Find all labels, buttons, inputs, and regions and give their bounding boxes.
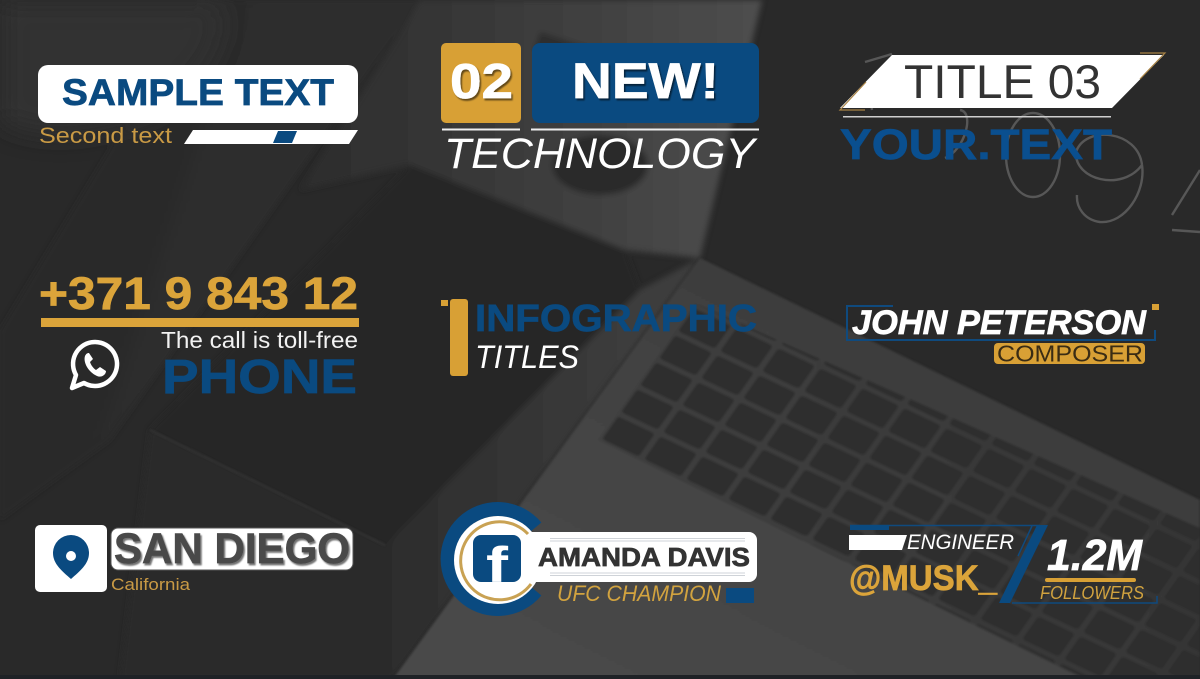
thin frame lines xyxy=(1012,526,1157,603)
title block: john peterson xyxy=(847,304,1159,366)
name: JOHN PETERSON xyxy=(852,304,1147,342)
rules under tiles xyxy=(442,128,759,130)
name: AMANDA DAVIS xyxy=(538,542,750,572)
divider rule xyxy=(843,116,1111,118)
white icon tile xyxy=(35,525,107,592)
your text: YOUR.TEXT xyxy=(840,121,1112,169)
state name: California xyxy=(111,575,191,594)
title block: san diego xyxy=(35,525,353,594)
toll-free note: The call is toll-free xyxy=(161,327,358,353)
followers label: FOLLOWERS xyxy=(1040,583,1144,603)
gold role pill xyxy=(994,343,1145,364)
blue frame xyxy=(847,306,1155,340)
blue block xyxy=(726,588,754,603)
blue top line xyxy=(850,524,1040,526)
title block: amanda davis xyxy=(448,509,757,609)
engineer text: ENGINEER xyxy=(907,531,1014,554)
gold bar xyxy=(1045,578,1136,582)
gold corner square xyxy=(1152,304,1159,310)
sample text heading: SAMPLE TEXT xyxy=(62,72,334,113)
handle: @MUSK_ xyxy=(849,559,997,598)
technology text: TECHNOLOGY xyxy=(444,130,758,178)
white circle xyxy=(454,516,542,604)
thin rules xyxy=(550,538,745,576)
title block: sample text xyxy=(38,65,358,148)
icon: location pin xyxy=(53,535,89,579)
icon: whatsapp xyxy=(72,342,117,388)
phone heading: PHONE xyxy=(162,351,357,404)
gold number tile xyxy=(441,43,521,123)
title block: infographic titles xyxy=(441,298,757,376)
title text: UFC CHAMPION xyxy=(557,581,721,606)
title 03 text: TITLE 03 xyxy=(904,55,1101,108)
gold bar xyxy=(41,318,359,327)
title block: phone xyxy=(39,268,359,404)
white name bar xyxy=(500,532,757,582)
icon: facebook xyxy=(473,535,521,593)
title block: 02 new technology xyxy=(441,43,759,178)
white label bar xyxy=(38,65,358,123)
blue top tab xyxy=(850,525,889,530)
title block: musk followers xyxy=(849,525,1157,603)
blue slanted marker xyxy=(273,131,297,143)
follower count: 1.2M xyxy=(1047,531,1143,580)
second text: Second text xyxy=(39,123,172,148)
white city bar xyxy=(111,528,353,570)
role text: COMPOSER xyxy=(997,340,1143,366)
white slanted bar xyxy=(849,535,907,550)
gold corner outline xyxy=(840,53,1165,110)
handwriting on notebook in background xyxy=(865,54,1200,232)
title block: title 03 xyxy=(840,53,1165,169)
blue new tile xyxy=(532,43,759,123)
gold small square xyxy=(441,300,448,306)
blue slash xyxy=(999,525,1048,603)
number 02: 02 xyxy=(450,55,513,109)
gold vertical bar xyxy=(450,299,468,376)
city name: SAN DIEGO xyxy=(114,525,350,573)
new heading: NEW! xyxy=(572,53,719,109)
white parallelogram xyxy=(840,55,1164,108)
white slanted strip xyxy=(184,130,358,144)
titles subheading: TITLES xyxy=(475,339,579,375)
blue c ring xyxy=(448,509,536,609)
gold arc xyxy=(461,522,531,600)
phone number: +371 9 843 12 xyxy=(39,268,358,319)
infographic heading: INFOGRAPHIC xyxy=(475,298,757,340)
icon: facebook: f xyxy=(486,537,508,593)
